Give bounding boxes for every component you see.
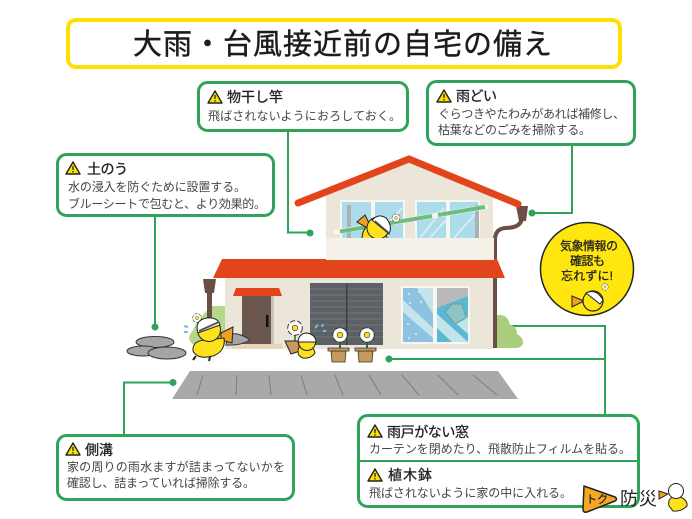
planters: [328, 330, 376, 362]
chick: with planter: [285, 323, 326, 358]
lower roof: [213, 259, 505, 278]
panel: ditch: 確認し、詰まっていれば掃除する。: [67, 475, 255, 490]
panel: sandbags: 水の浸入を防ぐために設置する。: [68, 179, 246, 194]
panel: laundry pole: [198, 82, 408, 130]
yellow reminder badge: 忘れずに!: [561, 269, 613, 283]
connector: sandbags: [152, 216, 158, 330]
yellow reminder badge: [540, 222, 634, 316]
sandbags: [127, 334, 250, 359]
icon: warning: [208, 91, 222, 103]
panel: window and planters: 雨戸がない窓: [387, 424, 469, 440]
shutter: [310, 283, 383, 345]
left downspout: [207, 293, 212, 321]
panel: laundry pole: 飛ばされないようにおろしておく。: [208, 109, 401, 123]
panel: window and planters: [358, 416, 639, 506]
upper roof: [298, 159, 518, 204]
right downspout: [495, 218, 522, 348]
panel: rain gutter: 雨どい: [456, 88, 497, 104]
icon: warning: [66, 162, 80, 174]
driveway: [172, 371, 518, 399]
icon: warning: [368, 469, 382, 481]
logo: トク: [586, 493, 608, 506]
upper windows: [340, 200, 405, 239]
panel: ditch: [58, 436, 294, 500]
panel: sandbags: [58, 154, 274, 216]
bushes: [497, 315, 523, 348]
connector: laundry pole: [288, 131, 314, 236]
connector: window and planters: [386, 322, 605, 415]
upper wall: [326, 163, 493, 240]
logo: [583, 484, 687, 512]
yellow reminder badge: 確認も: [570, 253, 605, 268]
chick: front left: [184, 315, 233, 361]
connector: rain gutter: [528, 144, 572, 216]
panel: ditch: 側溝: [85, 442, 113, 458]
icon: warning: [66, 443, 80, 455]
panel: rain gutter: ぐらつきやたわみがあれば補修し、: [438, 106, 625, 121]
laundry pole with chick: [326, 207, 494, 260]
door: [232, 344, 282, 349]
yellow reminder badge: 気象情報の: [560, 238, 618, 253]
garden window: [401, 286, 470, 344]
title: 大雨・台風接近前の自宅の備え: [133, 28, 552, 61]
icon: chick: [572, 285, 607, 311]
panel: ditch: 家の周りの雨水ますが詰まってないかを: [67, 459, 285, 474]
panel: rain gutter: [428, 82, 634, 144]
balcony: [326, 238, 494, 260]
panel: window and planters: 飛ばされないように家の中に入れる。: [369, 485, 572, 500]
panel: sandbags: 土のう: [87, 161, 128, 177]
lower wall: [225, 275, 494, 349]
connector: ditch: [124, 379, 176, 435]
panel: window and planters: 植木鉢: [388, 467, 432, 483]
panel: rain gutter: 枯葉などのごみを掃除する。: [438, 122, 591, 137]
logo: 防災: [620, 489, 657, 509]
panel: window and planters: カーテンを閉めたり、飛散防止フィルムを貼る。: [369, 441, 631, 456]
icon: warning: [368, 425, 382, 437]
panel: sandbags: ブルーシートで包むと、より効果的。: [68, 196, 266, 211]
title: [68, 20, 620, 67]
panel: laundry pole: 物干し竿: [227, 89, 283, 105]
icon: warning: [437, 90, 451, 102]
house: [189, 163, 528, 349]
